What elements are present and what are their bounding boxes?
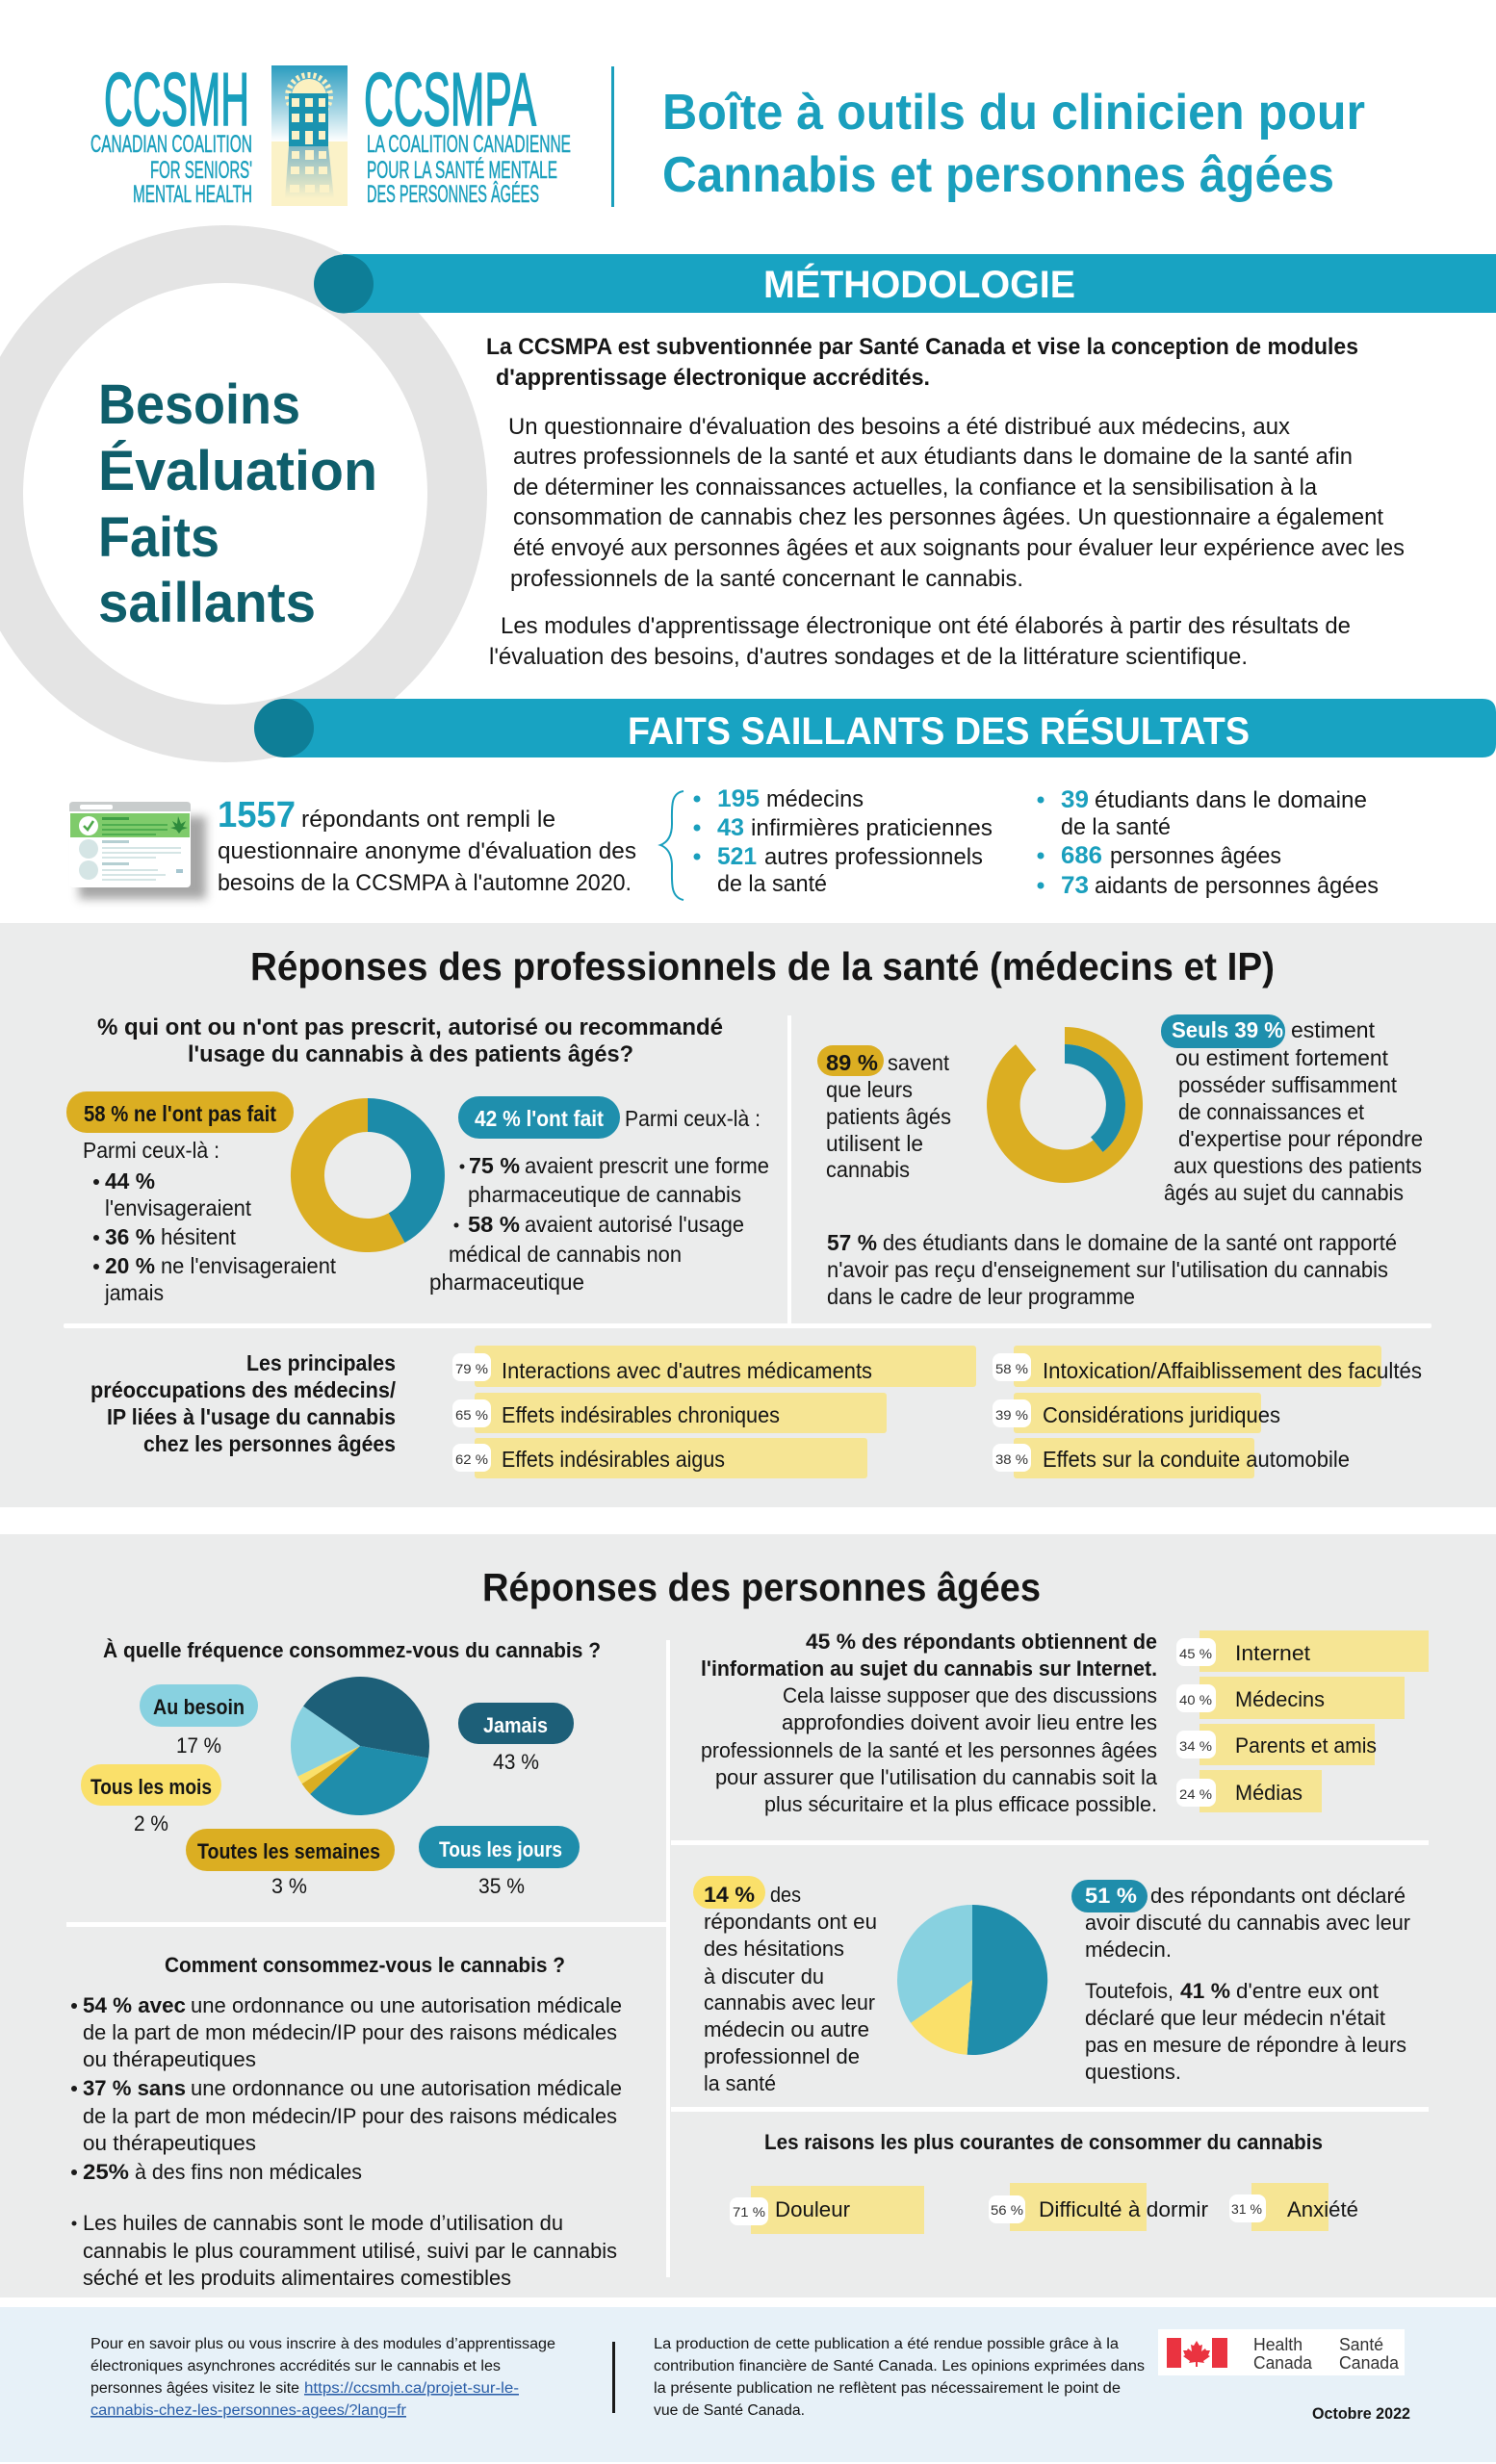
text: funding note: La production de cette publication a été rendue possible grâce à la xyxy=(654,2336,1119,2352)
text: 14 %: à discuter du xyxy=(704,1964,824,1989)
text: 42 % details: 58 % xyxy=(468,1212,520,1237)
banner: faits saillants des résultats: FAITS SAILLANTS DES RÉSULTATS xyxy=(628,709,1250,753)
text: 51 %: médecin. xyxy=(1085,1938,1172,1962)
text block: how consumed: à des fins non médicales xyxy=(135,2160,362,2184)
bar chart: reasons: Difficulté à dormir xyxy=(1039,2197,1208,2221)
list: respondents column 1: 521 xyxy=(717,843,757,870)
text block: how consumed: ou thérapeutiques xyxy=(83,2131,256,2155)
text block: how consumed: une ordonnance ou une autorisation médicale xyxy=(191,1993,622,2017)
list: respondents column 2: 39 xyxy=(1061,786,1089,813)
text block: how consumed: 37 % sans xyxy=(83,2076,186,2100)
text: 51 %: déclaré que leur médecin n'était xyxy=(1085,2006,1385,2030)
text block: how consumed: de la part de mon médecin/IP pour des raisons médicales xyxy=(83,2104,617,2128)
header logo: CCSMH / CCSMPA xyxy=(90,57,571,208)
question: frequency: À quelle fréquence consommez-vous du cannabis ? xyxy=(103,1638,601,1662)
logo text: CCSMH: CCSMH xyxy=(104,57,249,141)
text: funding note: vue de Santé Canada. xyxy=(654,2402,805,2419)
text: 14 %: des hésitations xyxy=(704,1937,844,1961)
bar chart: concerns right: Intoxication/Affaiblissement des facultés xyxy=(1043,1358,1422,1383)
bar chart: concerns left xyxy=(452,1346,976,1478)
question: prescribed xyxy=(97,1014,723,1067)
donut chart: 89 / 39 xyxy=(987,1027,1143,1183)
text: 51 %: 51 % xyxy=(1085,1884,1137,1908)
logo: Health Canada: Canada xyxy=(1253,2353,1313,2373)
question: prescribed: l'usage du cannabis à des patients âgés? xyxy=(188,1041,633,1067)
heading: main concerns: IP liées à l'usage du cannabis xyxy=(107,1404,396,1429)
legend: tous les mois: Tous les mois xyxy=(90,1775,212,1799)
text: seuls 39 %: Seuls 39 % xyxy=(1172,1017,1283,1042)
title xyxy=(662,85,1365,203)
text: 42 % details: médical de cannabis non xyxy=(449,1242,682,1267)
legend: tous les jours: 35 % xyxy=(478,1874,525,1898)
text block: methodology: été envoyé aux personnes âgées et aux soignants pour évaluer leur expérience avec les xyxy=(513,535,1405,561)
text: 51 % xyxy=(1071,1880,1410,2084)
list: respondents column 1: 195 xyxy=(717,785,760,812)
legend: au besoin: 17 % xyxy=(176,1733,221,1758)
bar chart: reasons: 31 % xyxy=(1231,2201,1262,2217)
text: 1557 respondents: répondants ont rempli le xyxy=(301,807,555,833)
text: more information: cannabis-chez-les-personnes-agees/?lang=fr xyxy=(90,2402,406,2419)
text: 89 % xyxy=(817,1045,951,1182)
panel: footer xyxy=(0,2307,1496,2462)
text: 14 %: répondants ont eu xyxy=(704,1910,877,1934)
text: seuls 39 %: âgés au sujet du cannabis xyxy=(1164,1180,1404,1205)
legend: jamais xyxy=(458,1703,574,1774)
date: Octobre 2022 xyxy=(1312,2404,1410,2423)
text block: methodology: La CCSMPA est subventionnée par Santé Canada et vise la conception de modules xyxy=(486,334,1358,360)
text: 51 %: pas en mesure de répondre à leurs xyxy=(1085,2033,1406,2057)
text: funding note: contribution financière de Santé Canada. Les opinions exprimées dans xyxy=(654,2358,1145,2374)
heading: seniors: Réponses des personnes âgées xyxy=(482,1565,1041,1609)
bar chart: concerns right: 38 % xyxy=(995,1451,1028,1467)
text block: methodology: l'évaluation des besoins, d'autres sondages et de la littérature scientifique. xyxy=(489,644,1248,670)
bar chart: reasons: 71 % xyxy=(733,2204,765,2220)
text block: methodology: consommation de cannabis chez les personnes âgées. Un questionnaire a également xyxy=(513,504,1383,530)
text: 42 % details: avaient prescrit une forme xyxy=(525,1153,769,1178)
text: 89 %: cannabis xyxy=(826,1157,910,1182)
text: 1557 respondents: besoins de la CCSMPA à l'automne 2020. xyxy=(218,870,632,896)
text block: methodology xyxy=(486,334,1405,670)
pie chart: frequency xyxy=(291,1677,429,1815)
legend: toutes les semaines: Toutes les semaines xyxy=(197,1839,380,1863)
legend: jamais: 43 % xyxy=(493,1750,539,1774)
icon: brace xyxy=(660,791,684,900)
list: respondents column 1: autres professionnels xyxy=(764,844,983,870)
callout: 42 % xyxy=(458,1096,761,1139)
text: 42 % details: 75 % xyxy=(469,1153,520,1178)
text: more information: électroniques asynchrones accrédités sur le cannabis et les xyxy=(90,2358,501,2374)
headline: Besoins Évaluation Faits saillants: Évaluation xyxy=(98,440,377,502)
bar chart: information sources: Médecins xyxy=(1235,1687,1325,1711)
bar chart: information sources: Internet xyxy=(1235,1641,1310,1665)
text: 42 % details: avaient autorisé l'usage xyxy=(525,1212,744,1237)
bar chart: concerns left: Interactions avec d'autres médicaments xyxy=(502,1358,872,1383)
text: 57 %: n'avoir pas reçu d'enseignement sur l'utilisation du cannabis xyxy=(827,1257,1388,1282)
list: respondents column 1 xyxy=(693,785,993,897)
text: 58 % details xyxy=(83,1138,337,1305)
list: respondents column 1: médecins xyxy=(766,786,864,812)
logo text: CCSMPA: DES PERSONNES ÂGÉES xyxy=(367,180,539,208)
heading: main concerns: chez les personnes âgées xyxy=(143,1431,396,1456)
text: 51 %: des répondants ont déclaré xyxy=(1150,1884,1406,1908)
legend: jamais: Jamais xyxy=(483,1713,548,1737)
list: respondents column 2: aidants de personnes âgées xyxy=(1095,873,1379,899)
text: 51 %: questions. xyxy=(1085,2060,1181,2084)
text block: how consumed: 25% xyxy=(83,2160,129,2184)
text: 14 %: 14 % xyxy=(704,1883,755,1907)
title: Cannabis et personnes âgées xyxy=(662,147,1334,203)
bar chart: reasons: Douleur xyxy=(775,2197,850,2221)
donut chart: 58 / 42 xyxy=(291,1098,445,1252)
text: 42 % details: pharmaceutique de cannabis xyxy=(468,1182,741,1207)
list: respondents column 2: 686 xyxy=(1061,842,1102,869)
legend: tous les mois: 2 % xyxy=(134,1811,168,1835)
text block: 45 % internet: des répondants obtiennent de xyxy=(862,1630,1157,1654)
text: seuls 39 %: estiment xyxy=(1291,1017,1376,1042)
list: respondents column 2 xyxy=(1038,786,1379,899)
legend: tous les jours: Tous les jours xyxy=(439,1837,562,1861)
bar chart: information sources xyxy=(1176,1630,1429,1812)
text: 14 %: des xyxy=(770,1883,801,1907)
logo text: CCSMPA: LA COALITION CANADIENNE xyxy=(367,131,571,158)
bar chart: concerns left: Effets indésirables aigus xyxy=(502,1447,725,1472)
text: seuls 39 %: aux questions des patients xyxy=(1174,1153,1422,1178)
text: seuls 39 %: d'expertise pour répondre xyxy=(1178,1126,1423,1151)
icon: questionnaire window xyxy=(69,802,206,899)
text block: 45 % internet xyxy=(701,1630,1158,1816)
list: respondents column 1: 43 xyxy=(717,814,744,841)
text block: 45 % internet: Cela laisse supposer que des discussions xyxy=(783,1683,1157,1707)
text: 58 % details: 44 % xyxy=(105,1168,155,1194)
text: 58 % details: jamais xyxy=(104,1280,164,1305)
list: respondents column 2: 73 xyxy=(1061,872,1089,899)
heading: main concerns xyxy=(90,1350,397,1456)
text: 89 %: patients âgés xyxy=(826,1104,951,1129)
text: 14 %: médecin ou autre xyxy=(704,2017,869,2041)
text: more information: https://ccsmh.ca/projet-sur-le- xyxy=(304,2380,519,2397)
bar chart: concerns left: Effets indésirables chroniques xyxy=(502,1402,780,1427)
text: 42 % details: pharmaceutique xyxy=(429,1270,584,1295)
text: 14 % xyxy=(693,1876,877,2095)
logo: Health Canada: Canada xyxy=(1339,2353,1400,2373)
legend: toutes les semaines: 3 % xyxy=(271,1874,307,1898)
bar chart: reasons: 56 % xyxy=(991,2202,1023,2218)
text: 51 %: Toutefois, xyxy=(1085,1979,1174,2003)
text: seuls 39 %: posséder suffisamment xyxy=(1178,1072,1398,1097)
text block: how consumed: une ordonnance ou une autorisation médicale xyxy=(191,2076,622,2100)
bar chart: information sources: 24 % xyxy=(1179,1786,1212,1802)
text: 58 % details: 20 % xyxy=(105,1253,155,1278)
text: 1557 respondents: 1557 xyxy=(218,795,296,835)
legend: au besoin xyxy=(140,1684,258,1758)
text block: methodology: autres professionnels de la santé et aux étudiants dans le domaine de la santé afin xyxy=(513,444,1353,470)
bar chart: information sources: Médias xyxy=(1235,1781,1303,1805)
text block: 45 % internet: approfondies doivent avoir lieu entre les xyxy=(782,1710,1157,1734)
text block: 45 % internet: 45 % xyxy=(806,1630,856,1654)
text: seuls 39 % xyxy=(1161,1014,1423,1205)
callout: 58 %: 58 % ne l'ont pas fait xyxy=(84,1101,276,1126)
grey ring with headline xyxy=(0,225,487,762)
heading: main concerns: Les principales xyxy=(246,1350,396,1375)
text: 57 %: 57 % xyxy=(827,1230,877,1255)
bar chart: information sources: 45 % xyxy=(1179,1646,1212,1661)
bar chart: information sources: 40 % xyxy=(1179,1692,1212,1707)
bar chart: reasons xyxy=(730,2183,1358,2234)
logo icon: building with sun xyxy=(271,65,348,206)
callout: 42 %: 42 % l'ont fait xyxy=(475,1106,604,1131)
logo: Health Canada: Health xyxy=(1253,2335,1303,2354)
banner: méthodologie: MÉTHODOLOGIE xyxy=(763,263,1075,306)
bar chart: reasons: Anxiété xyxy=(1287,2197,1358,2221)
logo text: CCSMPA xyxy=(364,57,571,208)
text: 58 % details: hésitent xyxy=(161,1224,237,1249)
logo text: CCSMH: FOR SENIORS' xyxy=(150,157,252,184)
text block: how consumed: de la part de mon médecin/IP pour des raisons médicales xyxy=(83,2020,617,2044)
bar chart: concerns left: 62 % xyxy=(455,1451,488,1467)
text: 51 %: d'entre eux ont xyxy=(1236,1979,1379,2003)
text block: how consumed: ou thérapeutiques xyxy=(83,2047,256,2071)
list: respondents column 2: étudiants dans le domaine xyxy=(1095,787,1367,813)
text: 89 %: savent xyxy=(888,1050,950,1075)
heading: main concerns: préoccupations des médecins/ xyxy=(90,1377,397,1402)
text block: methodology: de déterminer les connaissances actuelles, la confiance et la sensibilisation à la xyxy=(513,475,1318,500)
text: 42 % details xyxy=(429,1153,769,1295)
text: 57 % xyxy=(827,1230,1397,1309)
banner: méthodologie xyxy=(314,254,1496,314)
logo: Health Canada: Santé xyxy=(1339,2335,1383,2354)
text block: how consumed xyxy=(71,1953,622,2290)
text block: how consumed: Comment consommez-vous le cannabis ? xyxy=(165,1953,565,1977)
logo text: CCSMPA: POUR LA SANTÉ MENTALE xyxy=(367,156,557,184)
headline: Besoins Évaluation Faits saillants xyxy=(98,373,377,634)
legend: toutes les semaines xyxy=(186,1829,395,1898)
logo text: CCSMH xyxy=(90,57,252,208)
panel: seniors xyxy=(0,1534,1496,2297)
bar chart: concerns left: 65 % xyxy=(455,1407,488,1423)
bar chart: concerns right: 58 % xyxy=(995,1361,1028,1376)
text block: how consumed: Les huiles de cannabis sont le mode d’utilisation du xyxy=(83,2211,563,2235)
banner: faits saillants des résultats xyxy=(254,699,1496,757)
logo: Health Canada xyxy=(1158,2329,1405,2375)
legend: tous les jours xyxy=(419,1826,580,1898)
legend: tous les mois xyxy=(81,1764,221,1835)
legend: au besoin: Au besoin xyxy=(153,1695,245,1719)
text: 14 %: cannabis avec leur xyxy=(704,1990,875,2015)
logo text: CCSMH: CANADIAN COALITION xyxy=(90,131,252,158)
list: respondents column 2: personnes âgées xyxy=(1110,843,1281,869)
text block: 45 % internet: professionnels de la santé et les personnes âgées xyxy=(701,1738,1157,1762)
bar chart: concerns left: 79 % xyxy=(455,1361,488,1376)
list: respondents column 2: de la santé xyxy=(1061,814,1171,840)
headline: Besoins Évaluation Faits saillants: saillants xyxy=(98,572,316,634)
pie chart: doctor discussion xyxy=(897,1905,1047,2055)
text: more information: personnes âgées visitez le site xyxy=(90,2380,299,2397)
text block: 45 % internet: plus sécuritaire et la plus efficace possible. xyxy=(764,1792,1157,1816)
text block: methodology: Un questionnaire d'évaluation des besoins a été distribué aux médecins, aux xyxy=(508,414,1290,440)
text: 57 %: dans le cadre de leur programme xyxy=(827,1284,1135,1309)
headline: Besoins Évaluation Faits saillants: Besoins xyxy=(98,373,300,436)
text: 58 % details: Parmi ceux-là : xyxy=(83,1138,219,1163)
callout: 58 % xyxy=(66,1091,294,1133)
bar chart: concerns right: Considérations juridiques xyxy=(1043,1402,1280,1427)
panel: health professionals xyxy=(0,923,1496,1507)
text: 51 %: avoir discuté du cannabis avec leur xyxy=(1085,1911,1410,1935)
text: 1557 respondents: questionnaire anonyme d'évaluation des xyxy=(218,838,636,864)
text: 14 %: professionnel de xyxy=(704,2044,860,2068)
text: 14 %: la santé xyxy=(704,2071,776,2095)
list: respondents column 1: infirmières praticiennes xyxy=(751,815,993,841)
text: 57 %: des étudiants dans le domaine de la santé ont rapporté xyxy=(883,1230,1397,1255)
bar chart: concerns right: 39 % xyxy=(995,1407,1028,1423)
list: respondents column 1: de la santé xyxy=(717,871,827,897)
headline: Besoins Évaluation Faits saillants: Faits xyxy=(98,506,219,569)
text block: how consumed: cannabis le plus couramment utilisé, suivi par le cannabis xyxy=(83,2239,617,2263)
text: funding note: la présente publication ne reflètent pas nécessairement le point de xyxy=(654,2380,1121,2397)
text: funding note xyxy=(654,2336,1145,2419)
text: more information: Pour en savoir plus ou vous inscrire à des modules d’apprentissage xyxy=(90,2336,555,2352)
text: seuls 39 %: de connaissances et xyxy=(1178,1099,1365,1124)
bar chart: information sources: 34 % xyxy=(1179,1738,1212,1754)
text block: 45 % internet: l'information au sujet du cannabis sur Internet. xyxy=(701,1656,1157,1681)
bar chart: concerns right xyxy=(993,1346,1422,1478)
question: prescribed: % qui ont ou n'ont pas prescrit, autorisé ou recommandé xyxy=(97,1014,723,1040)
bar chart: information sources: Parents et amis xyxy=(1235,1733,1377,1758)
text block: methodology: d'apprentissage électronique accrédités. xyxy=(496,365,930,391)
text block: 45 % internet: pour assurer que l'utilisation du cannabis soit la xyxy=(715,1765,1158,1789)
logo text: CCSMH: MENTAL HEALTH xyxy=(133,181,252,208)
text: 51 %: 41 % xyxy=(1180,1979,1230,2003)
heading: health professionals: Réponses des professionnels de la santé (médecins et IP) xyxy=(250,944,1275,988)
text: 58 % details: 36 % xyxy=(105,1224,155,1249)
text block: methodology: professionnels de la santé concernant le cannabis. xyxy=(510,566,1023,592)
text block: methodology: Les modules d'apprentissage électronique ont été élaborés à partir des résultats de xyxy=(501,613,1351,639)
callout: 42 %: Parmi ceux-là : xyxy=(625,1106,761,1131)
text: 89 %: 89 % xyxy=(826,1050,878,1075)
bar chart: concerns right: Effets sur la conduite automobile xyxy=(1043,1447,1350,1472)
logo text: CCSMPA: CCSMPA xyxy=(364,57,536,141)
text: seuls 39 %: ou estiment fortement xyxy=(1175,1045,1389,1070)
text: 1557 respondents xyxy=(218,795,636,896)
text: 89 %: utilisent le xyxy=(826,1131,923,1156)
text: 58 % details: ne l'envisageraient xyxy=(161,1253,337,1278)
text: 58 % details: l'envisageraient xyxy=(105,1195,252,1220)
text block: how consumed: séché et les produits alimentaires comestibles xyxy=(83,2266,511,2290)
heading: common reasons: Les raisons les plus courantes de consommer du cannabis xyxy=(764,2130,1323,2154)
title: Boîte à outils du clinicien pour xyxy=(662,85,1365,141)
text block: how consumed: 54 % avec xyxy=(83,1993,186,2017)
text: 89 %: que leurs xyxy=(826,1077,913,1102)
text: more information xyxy=(90,2336,555,2419)
